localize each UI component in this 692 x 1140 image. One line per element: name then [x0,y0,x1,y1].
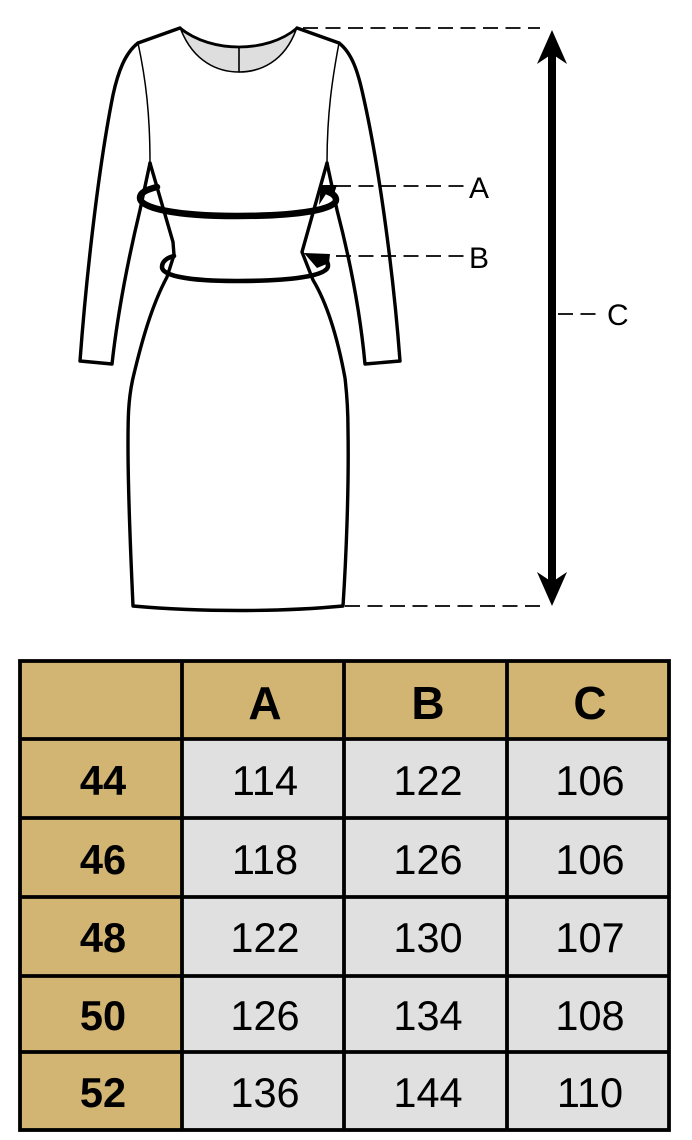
row: size 46: 126 [393,836,463,883]
label: C: C [607,299,629,332]
icon: dress bodice and neckline [138,28,339,163]
dashed leader: top of dress [303,27,540,29]
size table [20,661,669,1130]
row: size 48: 130 [393,914,463,961]
row: size 46 [80,836,625,883]
row: size 44: 114 [232,757,298,804]
icon: right sleeve [327,43,400,364]
table header row: C [573,677,607,729]
row: size 48 [80,914,625,961]
row: size 48: 48 [80,914,126,961]
row: size 44 [80,757,625,804]
dashed leader: C [558,313,598,315]
dashed leader: A [336,185,465,187]
icon: left sleeve [80,43,150,364]
label: A: A [469,172,489,205]
row: size 48: 122 [230,914,300,961]
row: size 50: 126 [230,992,300,1039]
row: size 50: 50 [80,992,126,1039]
row: size 52: 144 [393,1069,463,1116]
row: size 46: 118 [232,836,298,883]
row: size 52 [80,1069,623,1116]
row: size 52: 136 [230,1069,300,1116]
table cell backgrounds [20,661,669,1130]
row: size 44: 106 [555,757,625,804]
dashed leader: bottom of dress [345,605,540,607]
arrow: dress length [537,30,567,606]
dashed leader: B [336,255,465,257]
icon: waist measuring band B [162,253,330,281]
row: size 46: 106 [555,836,625,883]
table header row: A [248,677,282,729]
table header row [248,677,607,729]
table grid lines [20,661,669,1130]
icon: dress back neckline [181,30,296,72]
icon: dress body and skirt [128,163,348,610]
table header row: B [411,677,445,729]
row: size 50: 134 [393,992,463,1039]
row: size 48: 107 [555,914,625,961]
label: B: B [469,242,489,275]
row: size 50: 108 [555,992,625,1039]
icon: bust measuring band A [140,185,337,216]
row: size 50 [80,992,625,1039]
row: size 52: 110 [557,1069,623,1116]
row: size 44: 44 [80,757,126,804]
dress diagram [80,28,629,610]
row: size 44: 122 [393,757,463,804]
row: size 52: 52 [80,1069,126,1116]
row: size 46: 46 [80,836,126,883]
